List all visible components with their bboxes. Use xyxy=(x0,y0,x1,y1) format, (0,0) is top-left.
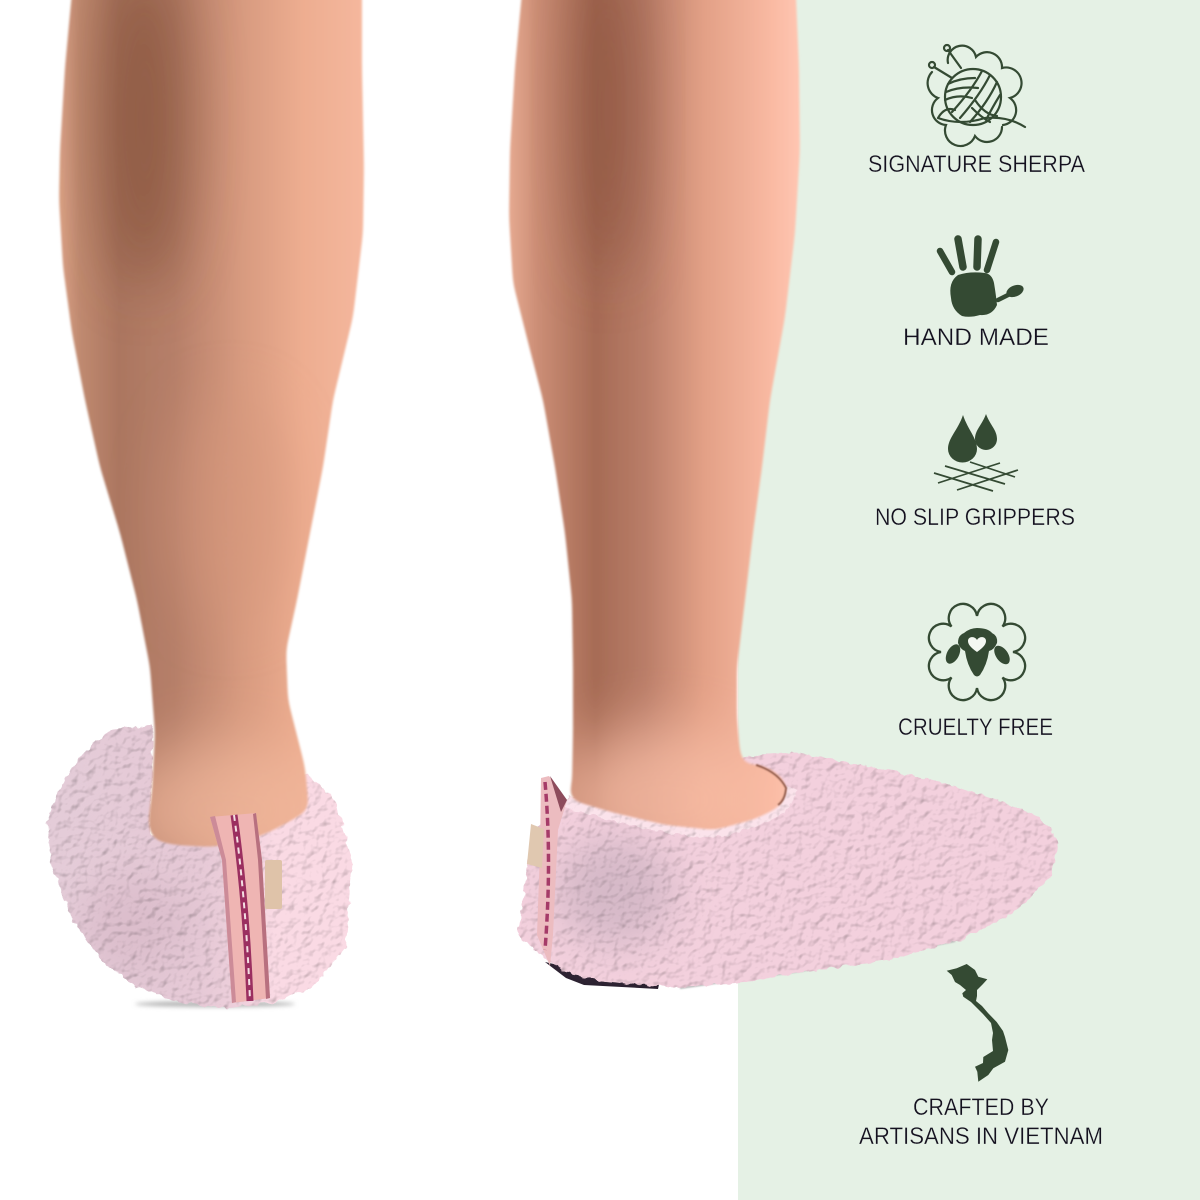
icon: yarn ball in flower xyxy=(928,45,1025,146)
feature: hand made xyxy=(903,239,1049,351)
right slipper brand tag xyxy=(527,824,544,868)
icon: hand print xyxy=(940,239,1025,317)
left slipper heel strap xyxy=(210,813,282,1003)
label: CRUELTY FREE xyxy=(898,714,1053,741)
icon: drops over grip net xyxy=(934,414,1018,491)
icon: map of vietnam xyxy=(947,964,1008,1082)
label: CRAFTED BY xyxy=(913,1094,1049,1121)
label: HAND MADE xyxy=(903,324,1049,351)
right slipper xyxy=(518,752,1059,989)
icon: sheep in flower xyxy=(929,604,1025,700)
left leg xyxy=(58,0,366,848)
label: ARTISANS IN VIETNAM xyxy=(859,1123,1103,1150)
left slipper xyxy=(47,725,352,1008)
right leg xyxy=(508,0,801,830)
feature: signature sherpa xyxy=(868,45,1085,178)
feature: cruelty free xyxy=(898,604,1053,741)
label: NO SLIP GRIPPERS xyxy=(875,504,1075,531)
left slipper brand tag xyxy=(265,860,282,909)
feature: no slip grippers xyxy=(875,414,1075,531)
label xyxy=(859,1094,1103,1150)
panel: features background xyxy=(738,0,1200,1200)
right slipper heel strap xyxy=(527,776,567,966)
feature: crafted in vietnam xyxy=(859,964,1103,1150)
label: SIGNATURE SHERPA xyxy=(868,151,1085,178)
